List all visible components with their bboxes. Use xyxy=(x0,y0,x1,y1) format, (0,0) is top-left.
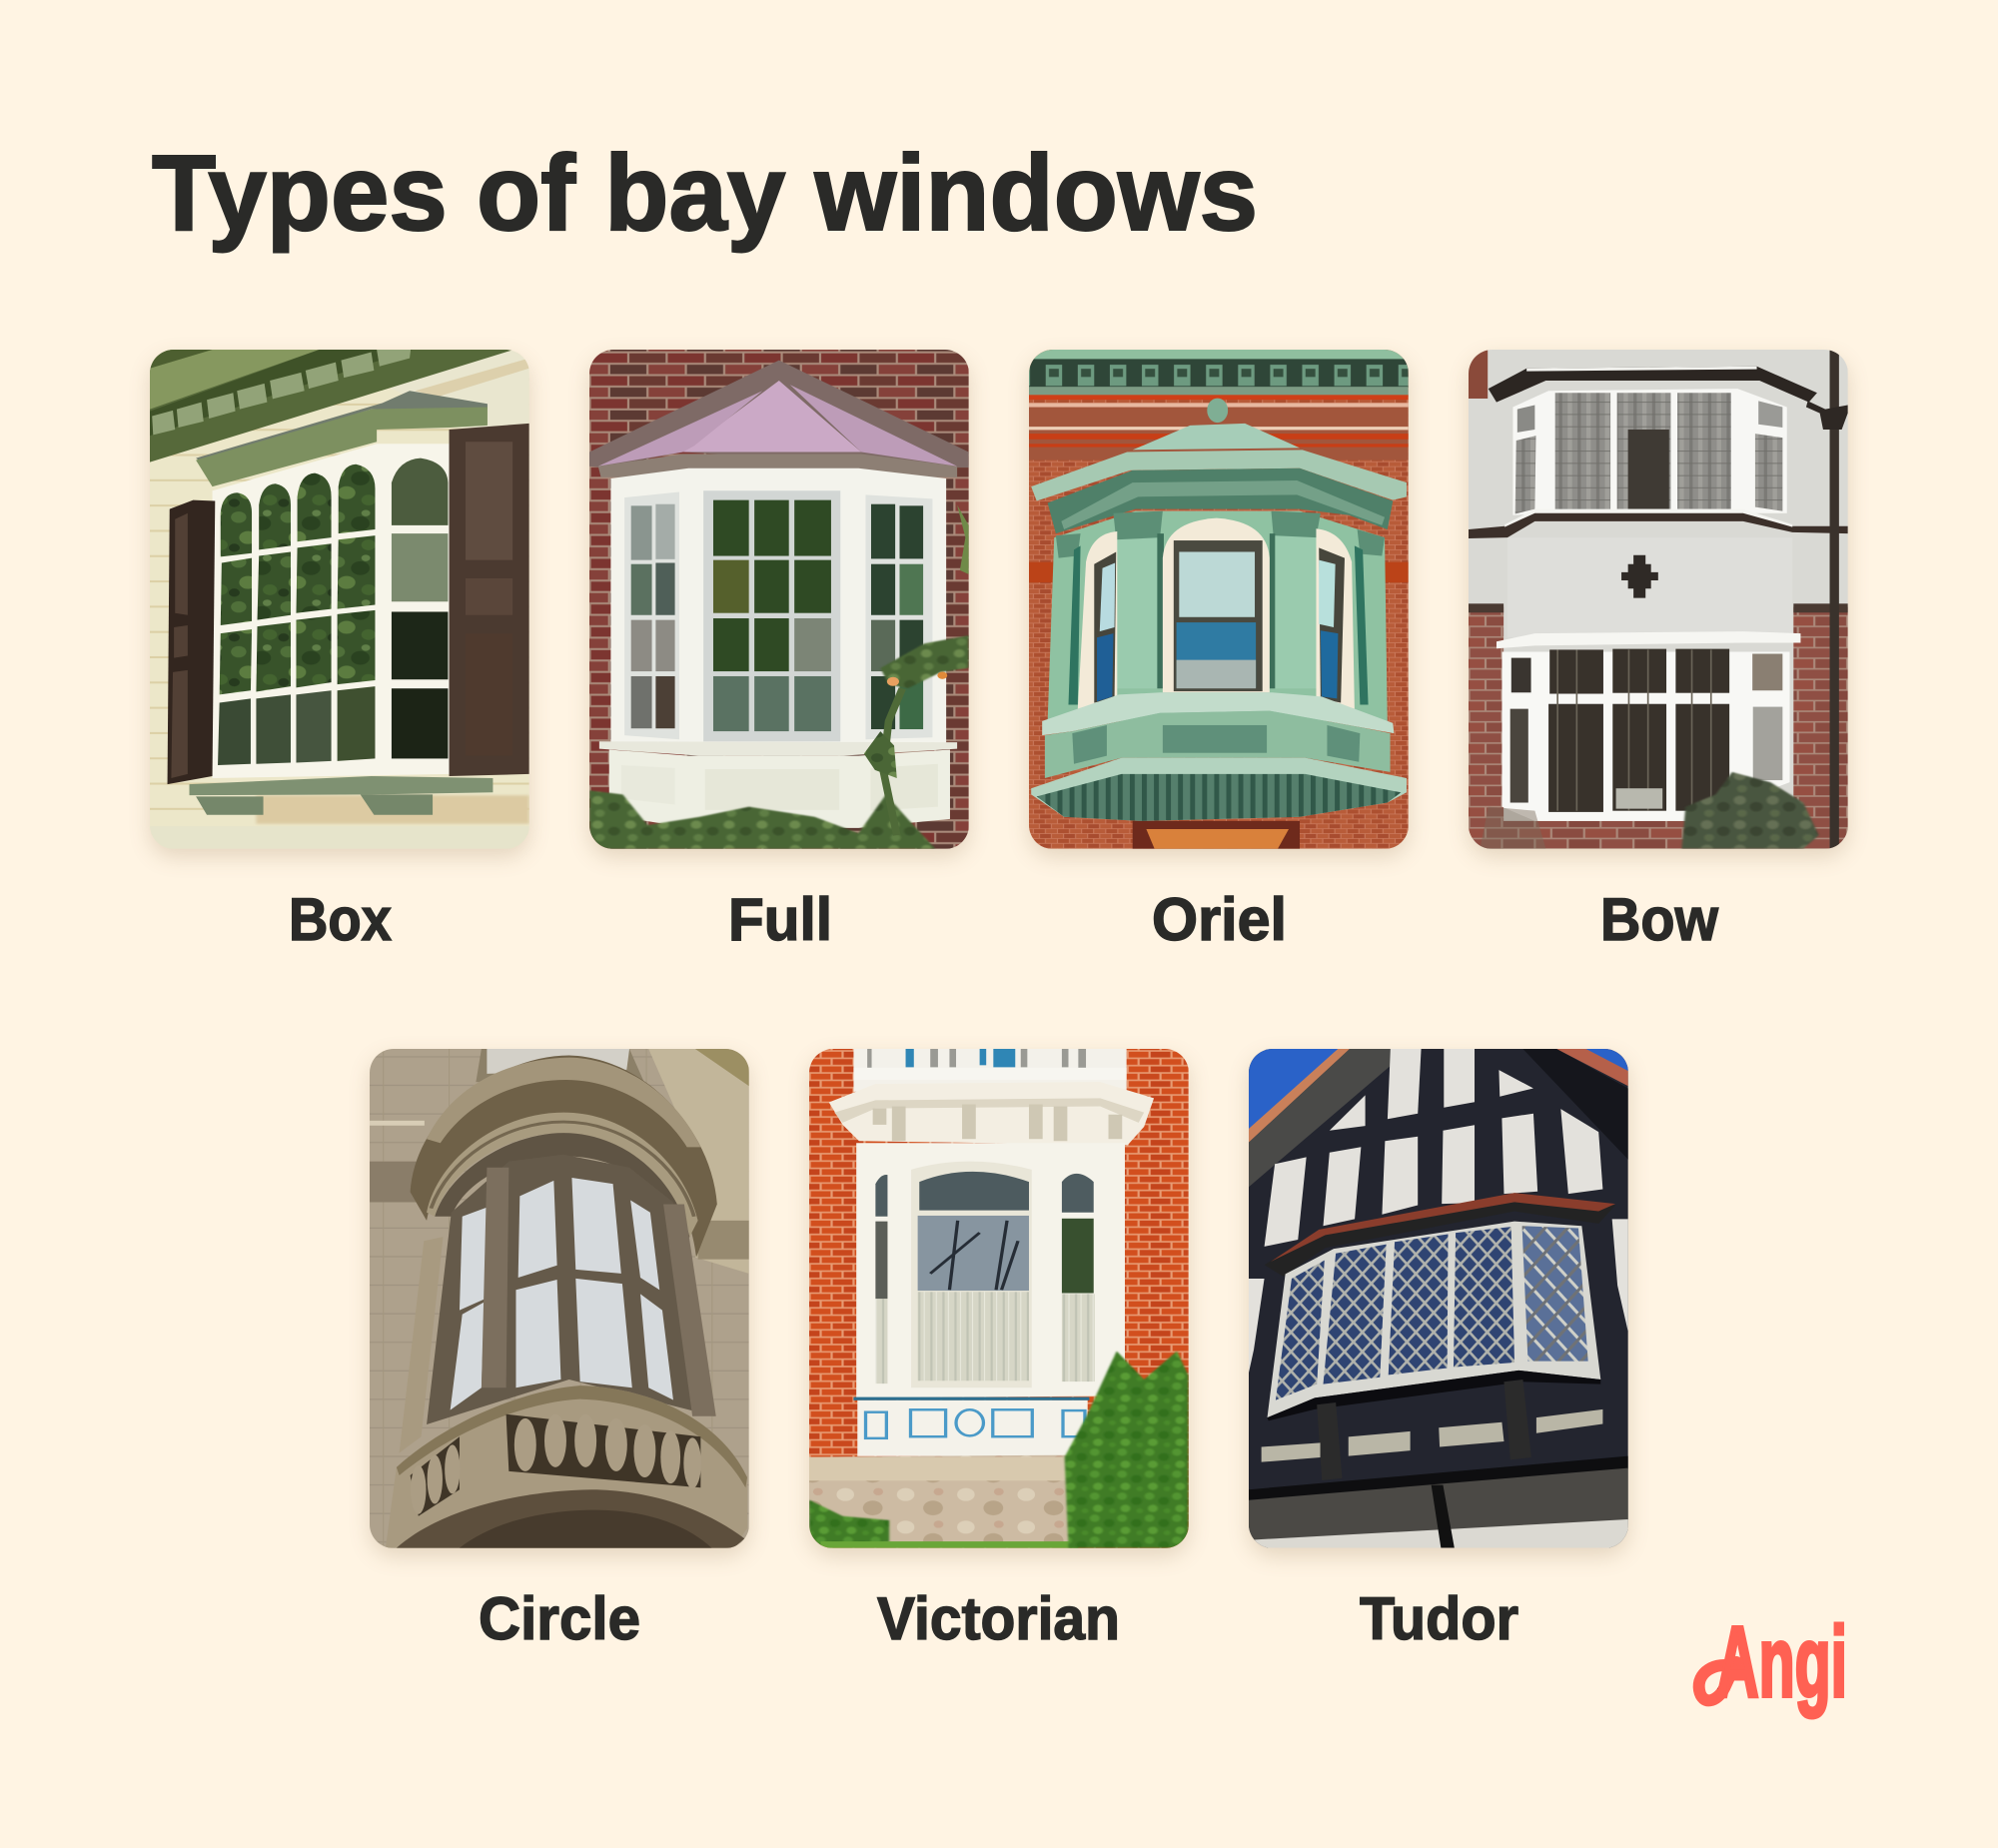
panel: Bow window xyxy=(1469,350,1848,953)
window frame xyxy=(427,1155,714,1424)
label: Oriel: Oriel xyxy=(1152,886,1287,953)
sill and base xyxy=(609,749,950,828)
panel: Circle window xyxy=(370,1049,749,1652)
lower roof xyxy=(1249,1456,1628,1501)
base panel xyxy=(853,1397,1089,1400)
shrub xyxy=(809,1499,889,1548)
title: Types of bay windows xyxy=(152,132,1258,253)
lower bay frame xyxy=(1501,651,1789,821)
center window xyxy=(1163,518,1270,692)
foliage xyxy=(589,790,935,849)
panel: Tudor window xyxy=(1249,1049,1628,1652)
photo: box bay window xyxy=(150,350,529,849)
icon: cross ornament xyxy=(1621,555,1658,598)
center sash xyxy=(911,1162,1032,1387)
photo: oriel bay window xyxy=(1029,350,1409,849)
photo: full bay window xyxy=(589,350,969,849)
label: Box: Box xyxy=(289,886,392,953)
brackets xyxy=(1317,1402,1342,1480)
stone base xyxy=(809,1455,1078,1543)
left shutter xyxy=(168,500,215,784)
canopy xyxy=(411,1056,717,1258)
right sash xyxy=(865,494,932,739)
center sash xyxy=(703,490,840,741)
window frame xyxy=(1268,1222,1600,1417)
label: Bow: Bow xyxy=(1600,886,1718,953)
bottom corbel xyxy=(1031,758,1407,821)
string course xyxy=(1469,511,1848,538)
panel: Victorian window xyxy=(809,1049,1189,1652)
bush xyxy=(1065,1351,1189,1548)
sill and brackets xyxy=(256,795,529,824)
label: Tudor: Tudor xyxy=(1360,1585,1518,1652)
shrubs xyxy=(1681,772,1819,849)
photo: bow bay window xyxy=(1469,350,1848,849)
left bay glazing xyxy=(218,464,375,765)
cornice xyxy=(1031,450,1407,500)
label: Circle: Circle xyxy=(479,1585,640,1652)
right sash xyxy=(1062,1174,1094,1213)
left sash xyxy=(875,1175,887,1217)
plaques xyxy=(1262,1409,1602,1462)
balcony xyxy=(386,1386,747,1548)
photo: victorian bay window xyxy=(809,1049,1189,1548)
photo: circle bay window xyxy=(370,1049,749,1548)
timber panels xyxy=(1249,1049,1628,1373)
body xyxy=(1048,511,1388,721)
door head xyxy=(1133,821,1300,849)
lower band xyxy=(1042,692,1394,735)
cornice xyxy=(829,1082,1154,1145)
label: Full: Full xyxy=(728,886,832,953)
downpipe xyxy=(1830,350,1839,849)
left sash xyxy=(624,491,679,739)
body xyxy=(856,1143,1125,1397)
upper bay frame xyxy=(1512,389,1787,515)
panel: Box window xyxy=(150,350,529,953)
label: Victorian: Victorian xyxy=(877,1585,1120,1652)
left window xyxy=(1078,531,1117,709)
bay roof xyxy=(1265,1194,1615,1277)
right window xyxy=(1316,528,1355,709)
panel: Oriel window xyxy=(1029,350,1409,953)
logo: Angi: Angi xyxy=(1716,1606,1847,1718)
dome xyxy=(1207,399,1228,423)
panel: Full window xyxy=(589,350,969,953)
balcony xyxy=(853,1049,1127,1092)
right shutter xyxy=(450,424,529,776)
photo: tudor bay window xyxy=(1249,1049,1628,1548)
logo: Angi xyxy=(1699,1606,1847,1718)
